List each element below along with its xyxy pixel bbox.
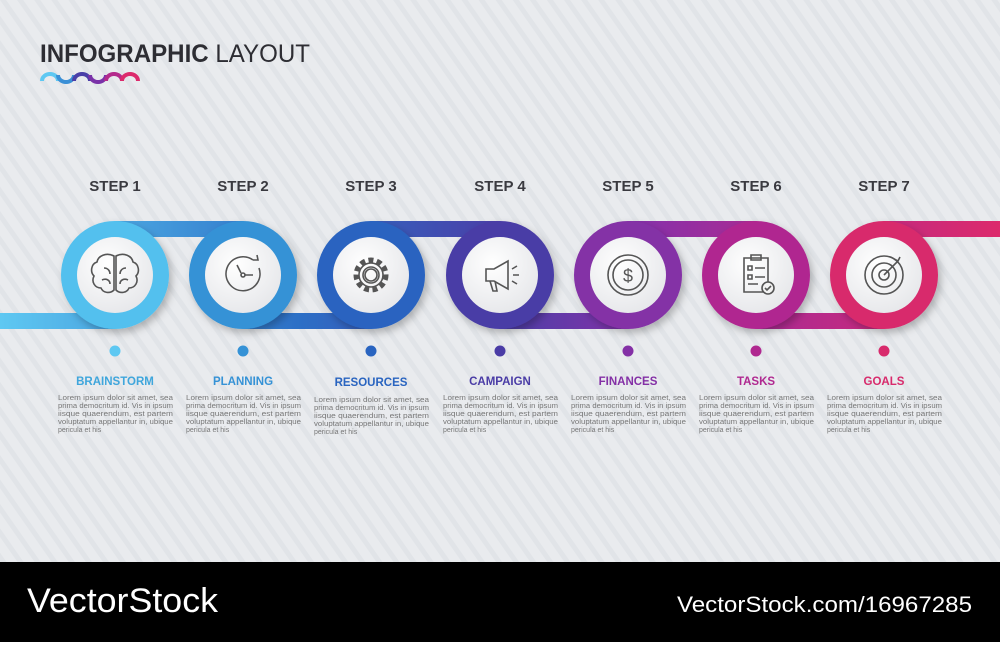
icon: dollar coin: $ <box>623 266 633 286</box>
circles <box>61 221 938 329</box>
footer <box>0 562 1000 642</box>
step headings: STEP 3 <box>345 178 397 195</box>
step headings: STEP 6 <box>730 178 782 195</box>
dots <box>110 346 890 356</box>
descriptions: voluptatum appellantur in, ubique <box>58 419 173 426</box>
wave decoration <box>42 74 138 82</box>
icon: megaphone <box>486 261 519 291</box>
step titles: FINANCES <box>599 376 658 388</box>
step titles: TASKS <box>737 376 775 388</box>
step titles: CAMPAIGN <box>469 376 531 388</box>
timeline band <box>0 221 1000 329</box>
icons <box>92 254 903 295</box>
footer: VectorStock.com/16967285 <box>677 592 972 617</box>
icon: clipboard <box>744 255 774 294</box>
step titles: BRAINSTORM <box>76 376 154 388</box>
icon: target <box>865 256 903 294</box>
step titles: PLANNING <box>213 376 273 388</box>
descriptions: Lorem ipsum dolor sit amet, sea <box>58 395 173 402</box>
step headings: STEP 4 <box>474 178 526 195</box>
icon: dollar coin <box>608 255 648 295</box>
step headings <box>89 178 910 195</box>
title <box>40 40 310 82</box>
step titles <box>76 376 905 389</box>
icon: gear <box>356 260 386 290</box>
descriptions: iisque quaerendum, est partem <box>58 411 173 418</box>
footer: VectorStock <box>27 582 219 620</box>
step headings: STEP 1 <box>89 178 141 195</box>
descriptions: pericula et his <box>58 427 102 434</box>
step titles: RESOURCES <box>335 377 408 389</box>
title: INFOGRAPHIC LAYOUT <box>40 40 310 68</box>
step headings: STEP 7 <box>858 178 910 195</box>
step titles: GOALS <box>864 376 905 388</box>
step headings: STEP 2 <box>217 178 269 195</box>
icon: brain <box>92 254 138 292</box>
icon: clock <box>226 255 260 291</box>
descriptions <box>58 395 942 436</box>
step headings: STEP 5 <box>602 178 654 195</box>
descriptions: prima democritum id. Vis in ipsum <box>58 403 173 410</box>
